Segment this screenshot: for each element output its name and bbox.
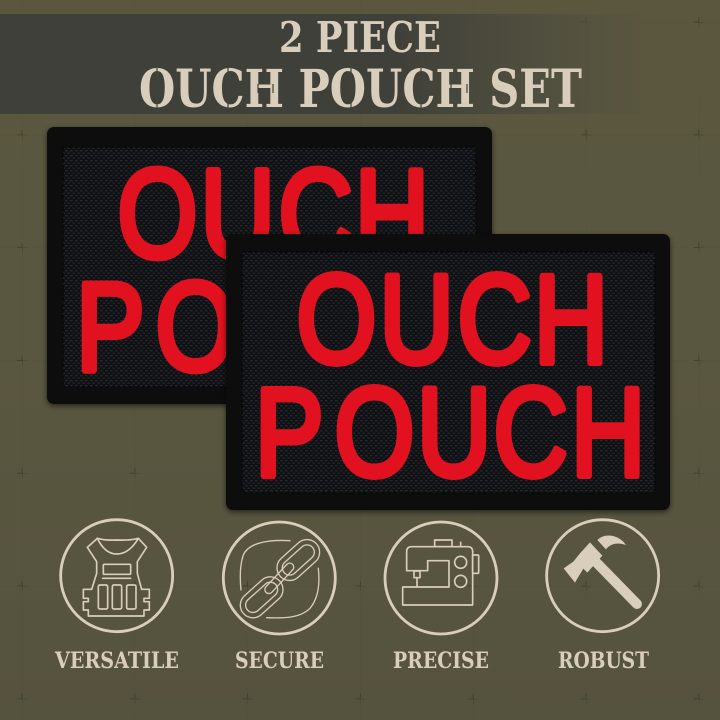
patch text: ouch: OUCH	[297, 251, 608, 390]
icon: chain link	[223, 522, 335, 634]
feature: robust	[547, 520, 659, 674]
heading: 2 piece: 2 PIECE	[279, 13, 441, 63]
front patch	[226, 234, 670, 510]
feature: precise	[385, 522, 497, 674]
feature: secure	[223, 522, 335, 674]
label: VERSATILE	[54, 648, 179, 674]
patch text: ouch: OUCH	[118, 145, 429, 284]
heading: ouch pouch set: OUCH POUCH SET	[139, 59, 582, 120]
label: ROBUST	[558, 648, 650, 674]
back patch	[47, 127, 492, 404]
icon: sewing machine	[385, 522, 497, 634]
icon: hammer	[547, 520, 659, 632]
patch text: pouch: POUCH	[255, 364, 645, 503]
label: PRECISE	[393, 648, 489, 674]
label: SECURE	[235, 648, 324, 674]
title banner	[0, 13, 640, 120]
icon: tactical vest	[61, 520, 173, 632]
patch text: pouch: POUCH	[76, 258, 466, 397]
feature: versatile	[54, 520, 179, 674]
